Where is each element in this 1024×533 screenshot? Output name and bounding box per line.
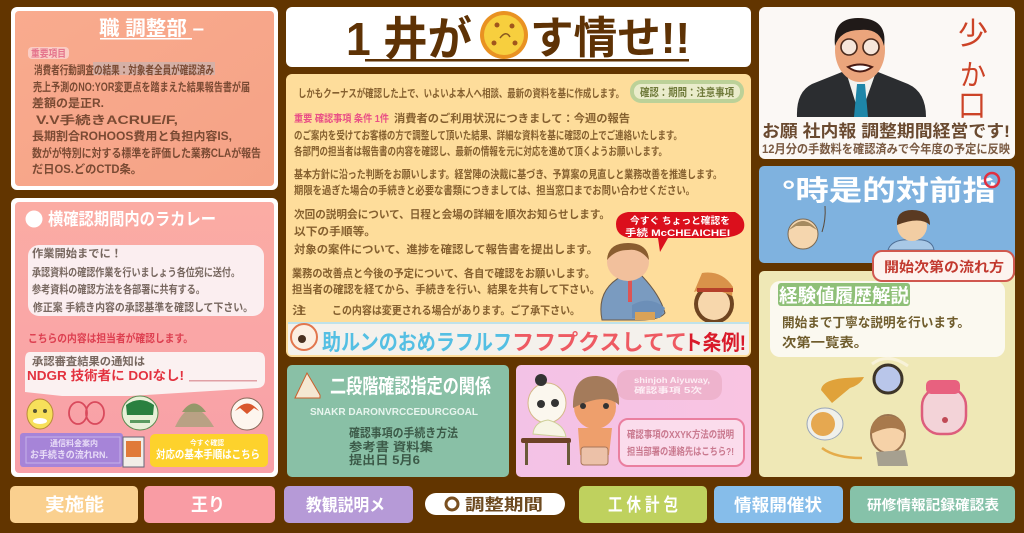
text block: green panel lines xyxy=(349,425,458,467)
white note bubble: 経験値履歴解説 xyxy=(779,285,909,307)
banner: colored slogan strip xyxy=(288,322,749,355)
speech bubble: red: 手続 McCHEAICHEI xyxy=(625,227,730,239)
nav button: peach xyxy=(10,486,138,523)
nav button: pink xyxy=(144,486,275,523)
icon: small booklet xyxy=(123,437,144,467)
text block: salmon panel body: 数がが特別に対する標準を評価した業務CLAが報告 xyxy=(32,146,261,160)
text: red note: こちらの内容は担当者が確認します。 xyxy=(28,331,193,345)
illustration: man in suit xyxy=(797,18,926,117)
icon: red ring xyxy=(985,173,999,187)
text block: article lines: 次回の説明会について、日程と会場の詳細を順次お知らせします。 xyxy=(294,207,610,221)
speech bubble: soft pink xyxy=(617,370,722,400)
nav button: teal xyxy=(850,486,1015,523)
callout: purple box: 通信料金案内 xyxy=(50,438,98,448)
nav button: lime xyxy=(579,486,707,523)
panel: top right portrait xyxy=(759,7,1015,159)
text box: white note: 作業開始までに！ xyxy=(32,246,122,260)
character: child xyxy=(871,415,908,466)
panel: main yellow article xyxy=(286,74,751,357)
callout: purple box: お手続きの流れRN. xyxy=(30,449,108,461)
nav button: pink: 王り xyxy=(191,495,225,515)
panel: pink dialog xyxy=(516,365,751,477)
icon: tiny figure xyxy=(295,373,320,398)
icon: red rings xyxy=(69,402,104,424)
icon: orange fruit xyxy=(807,408,843,440)
icon: white plate xyxy=(231,398,263,430)
text box: white note xyxy=(28,245,264,316)
callout: purple box xyxy=(20,433,123,467)
icon: cookie face xyxy=(480,11,528,59)
text block: article lines: 対象の案件について、進捗を確認して報告書を提出します。 xyxy=(294,242,598,256)
text: portrait caption xyxy=(762,122,1010,156)
nav button: teal: 研修情報記録確認表 xyxy=(867,497,999,513)
text box: white note: 参考資料の確認方法を各部署に共有する。 xyxy=(32,282,205,296)
character: boy in blue xyxy=(888,210,934,250)
text box: white note: 承認資料の確認作業を行いましょう各位宛に送付。 xyxy=(32,265,240,279)
text block: salmon panel body: 売上予測のNO:YOR変更点を踏まえた結果報告書が届 xyxy=(33,80,250,94)
vertical red text: か xyxy=(960,60,986,92)
tag: pink label: 重要項目 xyxy=(31,47,66,60)
white note bubble: 開始まで丁寧な説明を行います。 xyxy=(782,315,970,330)
text block: green panel lines: 参考書 資料集 xyxy=(349,439,433,454)
subheading: green panel: SNAKR DARONVRCCEDURCGOAL xyxy=(310,406,479,418)
speech bubble: white note: 承認審査結果の通知は xyxy=(32,354,145,368)
callout: red-border box: 担当部署の連絡先はこちら?! xyxy=(627,445,734,458)
panel: left pink xyxy=(11,198,278,477)
character: small head with cap xyxy=(694,273,734,324)
icon: amber splash arrow xyxy=(821,377,864,403)
text block: article lines: 以下の手順等。 xyxy=(294,224,376,238)
vertical red text xyxy=(958,18,988,123)
text block: article lines: のご案内を受けてお客様の方で調整して頂いた結果、詳細な資料を基に確認の上でご連絡いたします。 xyxy=(294,128,682,142)
title banner xyxy=(286,7,751,67)
banner: colored slogan strip: 助ルンのおめラフルフ xyxy=(322,330,512,355)
callout: red-border box: 確認事項のXXYK方法の説明 xyxy=(627,428,734,441)
text: portrait caption: お願 社内報 調整期間経営です! xyxy=(762,122,1010,141)
vertical red text: 少 xyxy=(958,18,988,51)
speech bubble: red xyxy=(616,212,744,252)
text block: green panel lines: 提出日 5月6 xyxy=(349,452,420,467)
heading: pink panel: 横確認期間内のラカレー xyxy=(48,210,216,229)
callout: yellow box xyxy=(150,434,268,467)
nav button: purple: 教観説明メ xyxy=(306,495,385,515)
icon: green face xyxy=(122,396,158,430)
callout: red-border box xyxy=(619,419,744,466)
title banner: 1 井が xyxy=(346,13,472,65)
icon: brown leaf mound xyxy=(175,404,214,427)
text block: article lines: 各部門の担当者は報告書の内容を確認し、最新の情報を元に対応を進めて頂くようお願いします。 xyxy=(294,144,667,158)
text block: article lines: 業務の改善点と今後の予定について、各自で確認をお願いします。 xyxy=(292,266,595,280)
text block: article lines: しかもクーナスが確認した上で、いよいよ本人へ相談、最新の資料を基に作成します。 xyxy=(298,86,624,100)
vertical red text: 口 xyxy=(958,90,986,123)
text block: salmon panel body: だ日OS.どのCTD条。 xyxy=(32,162,142,176)
character: brown-haired child xyxy=(573,376,619,465)
panel: beige cycle xyxy=(759,271,1015,477)
text block: salmon panel body: V.V手続きACRUE/F, xyxy=(36,113,178,127)
pill: green tag xyxy=(630,80,744,103)
heading: green panel: 二段階確認指定の関係 xyxy=(330,375,491,398)
callout: red-border label xyxy=(873,251,1014,281)
speech bubble: soft pink: shinjoh Aiyuway, xyxy=(634,376,710,385)
text block: article lines xyxy=(292,86,722,317)
icon: heading badge xyxy=(26,210,42,228)
banner: colored slogan strip: ト条例! xyxy=(684,332,746,355)
icon: yellow chick xyxy=(27,399,53,429)
speech bubble: white note: NDGR 技術者に DOIなし! xyxy=(27,368,184,383)
nav button: white pill: 調整期間 xyxy=(465,496,543,514)
text block: salmon panel body: 消費者行動調査の結果：対象者全員が確認済み xyxy=(34,63,214,77)
callout: red-border label: 開始次第の流れ方 xyxy=(884,259,1004,275)
nav button: white pill xyxy=(425,493,565,515)
callout: yellow box: 今すぐ確認 xyxy=(190,438,224,447)
text block: salmon panel body: 差額の是正R. xyxy=(32,96,104,110)
text block: article lines: 重要 確認事項 条件 1件 xyxy=(294,112,389,125)
icon: pink jar creature xyxy=(922,380,966,434)
text block: article lines: 消費者のご利用状況につきまして：今週の報告 xyxy=(394,111,630,125)
heading: salmon panel: 職 調整部 – xyxy=(99,17,204,40)
text block: article lines: 担当者の確認を経てから、手続きを行い、結果を共有して下さい。 xyxy=(292,282,600,296)
speech bubble: white note xyxy=(25,352,265,396)
character: round face xyxy=(788,206,825,249)
arrow: amber bottom xyxy=(822,448,862,458)
text block: article lines: 基本方針に沿った判断をお願いします。経営陣の決裁に基づき、予算案の見直しと業務改善を推進します。 xyxy=(294,167,722,181)
panel: top left salmon xyxy=(11,7,278,190)
nav button: blue xyxy=(714,486,843,523)
speech bubble: red: 今すぐ ちょっと確認を xyxy=(630,215,730,227)
text block: salmon panel body: 長期割合ROHOOS費用と負担内容IS, xyxy=(32,129,232,143)
text block: green panel lines: 確認事項の手続き方法 xyxy=(349,425,458,440)
panel: blue characters xyxy=(759,166,1015,263)
text block: article lines: この内容は変更される場合があります。ご了承下さい。 xyxy=(332,303,580,317)
nav button: blue: 情報開催状 xyxy=(734,496,822,515)
title banner: す情せ!! xyxy=(530,14,690,63)
nav button: peach: 実施能 xyxy=(45,495,104,515)
icon: round mirror xyxy=(872,358,908,393)
character: seated man in suit xyxy=(601,243,665,320)
nav button: purple xyxy=(284,486,413,523)
nav button: lime: 工 休 計 包 xyxy=(608,494,678,515)
text: portrait caption: 12月分の手数料を確認済みで今年度の予定に反映 xyxy=(762,141,1010,156)
banner: colored slogan strip: フフプクスしてて xyxy=(512,330,687,355)
text box: white note: 修正案 手続き内容の承認基準を確認して下さい。 xyxy=(33,300,253,314)
panel: green info xyxy=(287,365,509,477)
pill: green tag: 確認：期間：注意事項 xyxy=(640,85,734,99)
text block: article lines: 期限を過ぎた場合の手続きと必要な書類につきましては、担当窓口までお問い合わせください。 xyxy=(294,183,695,197)
text block: salmon panel body xyxy=(32,62,261,176)
character: white snowman with table xyxy=(521,374,571,465)
white note bubble xyxy=(770,281,1005,357)
heading: blue panel: °時是的対前指 xyxy=(782,175,996,206)
text block: article lines: 注 xyxy=(292,303,306,317)
white note bubble: 次第一覧表。 xyxy=(782,335,868,350)
callout: yellow box: 対応の基本手順はこちら xyxy=(156,447,260,461)
speech bubble: soft pink: 確認事項 5次 xyxy=(634,385,702,395)
